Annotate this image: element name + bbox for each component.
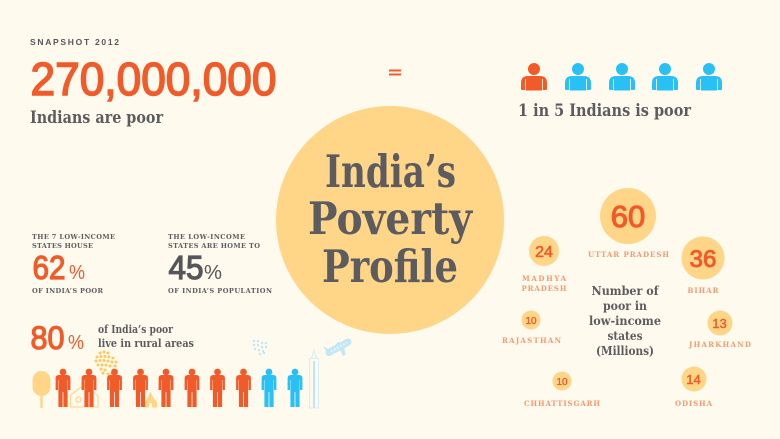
bubble: Rajasthan 10: RAJASTHAN [502,336,562,345]
text: Number of poor in low-income states (Millions): (Millions) [596,344,654,358]
stat: 45 percent [168,233,272,295]
icon: hut [145,391,157,408]
title: Profile [322,240,458,293]
bubble: Odisha 14: 14 [686,372,701,387]
bubble: Odisha 14 [675,366,713,408]
stat: 62 percent: OF INDIA’S POOR [32,287,104,295]
text: Number of poor in low-income states (Millions): low-income [589,314,661,328]
bubble: Madhya Pradesh 24 [522,236,567,293]
stat: 45 percent: 45 [168,249,204,286]
icon: person 9 [262,369,276,407]
icon: person 5 [159,369,173,407]
stat: 80 percent [30,320,84,356]
pictogram: 8 of 10 people rural [56,369,302,407]
bubble: Madhya Pradesh 24: 24 [535,244,553,261]
icon: poor person [521,63,547,90]
stat: 80 percent: 80 [30,320,64,356]
bubble: Rajasthan 10: 10 [525,316,537,327]
icon: person 3 [609,63,635,90]
bubble: Madhya Pradesh 24: MADHYA [522,274,567,283]
stat: 62 percent: 62 [32,249,66,286]
icon: person 3 [107,369,122,407]
bubble: Odisha 14: ODISHA [675,399,713,408]
text: Number of poor in low-income states (Millions): Number of [592,284,659,298]
bubble: Jharkhand 13: JHARKHAND [688,340,751,349]
stat: 62 percent [32,233,115,295]
bubble: Chhattisgarh 10 [524,372,600,408]
text: of India's poor live in rural areas: of India’s poor [98,323,173,336]
bubble: Uttar Pradesh 60: 60 [611,199,645,234]
text: of India's poor live in rural areas: live in rural areas [98,337,194,350]
bubble: Madhya Pradesh 24: PRADESH [522,284,567,293]
bubble: Jharkhand 13 [688,310,751,349]
stat: 62 percent: STATES HOUSE [32,242,93,250]
icon: tree [32,371,50,408]
bubble: Chhattisgarh 10: 10 [556,377,568,388]
bubble: Uttar Pradesh 60: UTTAR PRADESH [588,250,669,259]
icon: person 8 [236,369,251,407]
stat: 62 percent: % [69,262,85,284]
equals sign [389,70,401,76]
stat: 45 percent: OF INDIA’S POPULATION [168,287,272,295]
icon: person 10 [288,369,302,407]
icon: person 4 [652,63,678,90]
text: Number of poor in low-income states (Millions): states [608,329,643,343]
label: snapshot 2012: SNAPSHOT 2012 [30,37,119,47]
icon: house [70,385,98,407]
icon: skyscraper [310,350,318,408]
icon: person 1 [56,369,70,407]
pictogram: 1 in 5 people [521,63,722,90]
stat: 45 percent: THE LOW-INCOME [168,233,245,241]
title: Poverty [308,192,474,245]
text: Number of poor in low-income states (Millions): poor in [603,299,647,313]
icon: person 4 [133,369,148,407]
bubble: Bihar 36: 36 [690,246,716,273]
decoration: yellow dot cluster [94,350,118,376]
icon: person 7 [210,369,225,407]
decoration: blue dot cluster [253,340,267,355]
text: Indians are poor: Indians are poor [30,108,164,128]
icon: person 2 [82,369,96,407]
bubble: Bihar 36: BIHAR [688,286,719,295]
stat: 80 percent: % [68,332,84,354]
bubble: Uttar Pradesh 60 [588,188,669,259]
bubble: Jharkhand 13: 13 [712,316,727,331]
bubble: Rajasthan 10 [502,310,562,345]
icon: person 5 [696,63,722,90]
text: 1 in 5 Indians is poor: 1 in 5 Indians is poor [518,101,692,121]
stat: 62 percent: THE 7 LOW-INCOME [32,233,115,241]
central title circle [276,106,504,334]
icon: house window [76,397,81,402]
stat: 45 percent: % [204,262,222,284]
stat: 45 percent: STATES ARE HOME TO [168,242,260,250]
bubble: Chhattisgarh 10: CHHATTISGARH [524,399,600,408]
headline number: 270,000,000: 270,000,000 [30,53,276,105]
icon: person 2 [565,63,591,90]
icon: airplane [323,342,348,356]
bubble: Bihar 36 [682,236,724,295]
title: India’s [325,145,456,198]
icon: person 6 [185,369,199,407]
